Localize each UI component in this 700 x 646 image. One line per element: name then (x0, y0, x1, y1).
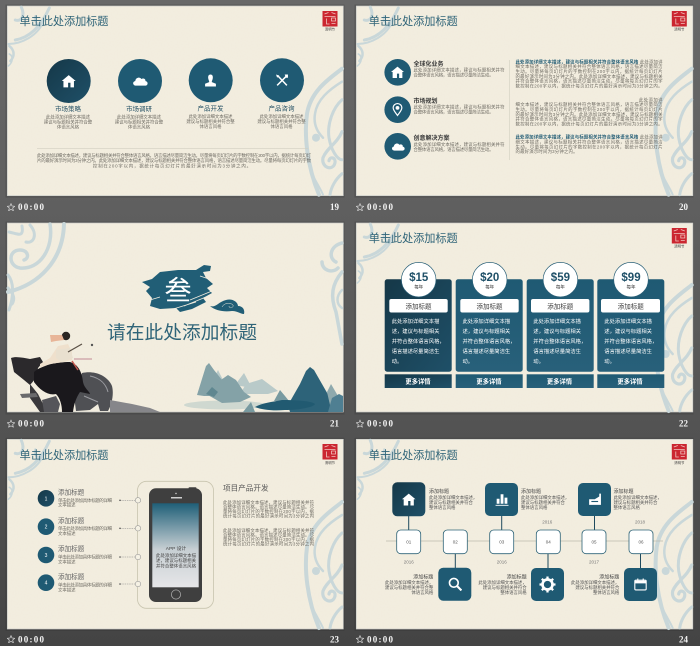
list item: global business: 全球化业务 (414, 60, 444, 68)
illustration: boy riding buffalo (11, 332, 160, 412)
pricing card 99: 更多详情 (617, 376, 643, 386)
step 02 (385, 530, 471, 601)
paragraph 1: 合整体语言风格，语言描述尽量简洁生动。尽 (223, 504, 315, 510)
phone mockup: 并符合整体语言风格 (156, 562, 197, 570)
list item 3: 文本描述 (58, 558, 76, 566)
character: section three: 叁 (164, 276, 192, 306)
step 02: 此处添加详细文本描述， (385, 579, 433, 586)
item text: product development: 体语言风格 (200, 123, 222, 130)
paragraph 2: 的最好演示时间为3分钟之内。此处添加详细文本描述，建议与标题相关 (516, 111, 663, 118)
list item 3: 3 (45, 553, 48, 559)
list item 1 (38, 488, 141, 508)
pricing card 20 (456, 262, 523, 388)
pricing card 15: 语言描述尽量简洁生 (392, 347, 440, 355)
paragraph 1: 此处添加详细文本描述，建议与标题相关并符 (223, 499, 315, 506)
pricing card 99: 并符合整体语言风格， (604, 337, 657, 345)
footer: slide 23: 00:00 (18, 634, 44, 644)
phone mockup: 此处添加详细文本描 (156, 552, 197, 559)
item text: market strategy: 市场策略 (55, 104, 82, 113)
pricing card 20: 动。 (462, 358, 473, 365)
item text: product consulting (257, 104, 306, 130)
item text: product consulting: 此处添加详细文本描述 (260, 113, 304, 120)
list item 2 (38, 516, 141, 537)
pricing card 59: 每年 (556, 284, 565, 290)
phone mockup: 述，建议与标题相关 (156, 557, 197, 564)
step 01: 此处添加详细文本描述， (429, 494, 477, 501)
pricing card 59: 述，建议与标题相关 (533, 327, 582, 335)
paragraph 2: 量将每页幻灯片的字数控制在200字以内，据 (223, 536, 315, 543)
logo seal (322, 444, 338, 465)
panel: slide 24 timeline (354, 438, 694, 631)
list item 3: 添加标题 (58, 544, 85, 553)
pricing card 59: 并符合整体语言风格， (533, 337, 586, 345)
list item 1: 添加标题 (58, 488, 85, 496)
icon: global business (384, 59, 411, 86)
pricing card 20: $20 (480, 272, 499, 284)
list item 4: 单击此处添加具体标题的详细 (58, 582, 113, 588)
logo seal: 清明节 (674, 460, 685, 465)
footer: slide 23: 23 (330, 634, 340, 644)
step 04: 此处添加详细文本描述， (478, 579, 527, 586)
paragraph 1: 量将每页幻灯片的字数控制在200字以内，据 (223, 508, 315, 515)
footer: slide 20: 20 (679, 202, 688, 212)
footer: slide 24 (356, 634, 688, 644)
step 06: 06 (638, 540, 644, 544)
paragraph 2: 此处添加详 (639, 96, 663, 103)
logo seal (322, 11, 338, 32)
phone mockup: APP 设计 (166, 545, 186, 552)
paragraph 1: 并符合整体语言风格，语言描述尽量简洁生动。尽量将每页幻灯片的字 (516, 78, 663, 85)
pricing card 15 (385, 262, 452, 388)
footer: slide 19: 19 (330, 202, 340, 212)
list item: market planning (414, 97, 505, 116)
step 03: 添加标题 (521, 488, 541, 495)
step 06: 2018 (635, 520, 646, 524)
list item: creative solutions (414, 134, 505, 153)
list item 3 (38, 544, 141, 566)
pricing card 15: 并符合整体语言风格， (392, 337, 445, 345)
item text: product consulting: 体语言风格 (271, 123, 293, 130)
step 04: 整体语言风格 (500, 589, 527, 596)
step 04: 2016 (542, 520, 553, 524)
logo seal (672, 228, 687, 248)
list item 2: 2 (45, 525, 48, 531)
footer: slide 24: 00:00 (367, 634, 394, 644)
icon: product development (189, 58, 233, 102)
pricing card 99 (597, 262, 664, 388)
paragraph 2: 数控制在200字以内，据统计每页幻灯片的最好演示时间为3分钟之内。 (516, 120, 662, 127)
step 02: 建议与标题相关并符合整 (385, 584, 434, 591)
list item: creative solutions: 合整体语言风格，语言描述尽量简洁生动。 (414, 146, 494, 153)
pricing card 59: 更多详情 (547, 376, 573, 386)
step 01: 建议与标题相关并符合 (429, 499, 474, 506)
footer: slide 20: 00:00 (367, 202, 394, 212)
paragraph 2: 生动。尽量将每页幻灯片的字数控制在200字以内，据统计每页幻灯片 (516, 106, 662, 113)
pricing card 20: 更多详情 (476, 376, 502, 386)
logo seal (672, 11, 687, 32)
paragraph (37, 152, 312, 170)
item text: product consulting: 产品咨询 (268, 104, 295, 112)
paragraph: 控制在200字以内，据统计每页幻灯片的最好演示时间为3分钟之内。 (93, 162, 251, 170)
step 05 (578, 483, 662, 564)
decoration: right swirl (322, 243, 342, 344)
item text: market research: 体语言风格 (128, 124, 151, 130)
item text: market research: 此处添加详细文本描述 (117, 114, 162, 120)
list item 1: 文本描述 (58, 502, 76, 508)
step 03: 2016 (497, 560, 507, 564)
footer: slide 21 (7, 418, 339, 428)
list item 2: 添加标题 (58, 516, 85, 525)
item text: market strategy: 建议与标题相关并符合整 (44, 118, 93, 126)
step 03: 整体语言风格 (521, 504, 548, 511)
item text: market research: 市场调研 (126, 104, 152, 113)
item text: product development: 此处添加详细文本描述 (189, 113, 233, 120)
item text: product development (186, 104, 235, 130)
illustration: ink mountains (184, 363, 343, 412)
item text: market strategy: 体语言风格 (57, 124, 80, 130)
step 01: 2016 (404, 560, 414, 564)
paragraph 2: 细文本描述，建议与标题相关并符合整体语言风格，语言描述尽量简洁 (516, 101, 663, 108)
title: 单击此处添加标题 (369, 14, 458, 28)
pricing card 59: 动。 (533, 358, 544, 365)
footer: slide 19 (7, 202, 339, 212)
pricing card 20: 述，建议与标题相关 (462, 327, 511, 335)
step 03: 建议与标题相关并符合 (521, 499, 566, 506)
step 01: 01 (406, 540, 412, 544)
step 03 (485, 483, 569, 564)
item text: market research (115, 104, 164, 130)
paragraph 1: 生动。尽量将每页幻灯片的字数控制在200字以内，据统计每页幻灯片 (516, 68, 662, 75)
pricing card 99: $99 (621, 272, 641, 284)
step 06: 整体语言风格 (593, 589, 620, 596)
item text: product development: 建议与标题相关并符合整 (186, 118, 235, 125)
list item: global business: 合整体语言风格，语言描述尽量简洁生动。 (414, 72, 494, 78)
icon: market strategy (47, 59, 91, 103)
pricing card 59: $59 (551, 272, 570, 284)
pricing card 20: 每年 (485, 284, 495, 290)
pricing card 20: 并符合整体语言风格， (462, 337, 515, 345)
paragraph 1: 数控制在200字以内，据统计每页幻灯片的最好演示时间为3分钟之内。 (516, 82, 662, 90)
list item: market planning: 市场规划 (414, 97, 438, 105)
paragraph 1: 的最好演示时间为3分钟之内。此处添加详细文本描述，建议与标题相关 (516, 73, 663, 80)
paragraph 3: 的最好演示时间为3分钟之内。 (516, 148, 578, 155)
panel: slide 19 icons (6, 4, 344, 198)
paragraph 1: 此处添加详细文本描述，建议与标题相关并符合整体语言风格 此处添加详 (516, 58, 663, 65)
step 03: 03 (499, 540, 505, 544)
panel: slide 22 pricing (354, 222, 694, 414)
list item 4: 文本描述 (58, 586, 76, 594)
paragraph: 片的最好演示时间为3分钟之内。此处添加详细文本描述，建议与标题相关并符合整体语言风格，语言描述尽量简洁生动。尽量将每页幻灯片的字数 (37, 157, 312, 164)
step 04: 04 (546, 540, 551, 544)
pricing card 59: 此处添加详细文本描 (533, 317, 582, 325)
paragraph 3: 此处添加详细文本描述，建议与标题相关并符合整体语言风格 此处添加详 (516, 134, 663, 141)
outline around phone (138, 481, 214, 608)
footer: slide 22: 00:00 (367, 418, 394, 428)
pricing card 15: 添加标题 (406, 301, 432, 310)
list item: creative solutions: 此处添加详细文本描述，建议与标题相关并符 (414, 141, 505, 148)
footer: slide 23 (7, 634, 339, 644)
list item 4: 4 (45, 581, 48, 587)
step 05: 整体语言风格 (614, 504, 640, 511)
paragraph 2: 此处添加详细文本描述，建议与标题相关并符 (223, 527, 315, 534)
section title: 请在此处添加标题 (107, 322, 257, 343)
paragraph 1: 统计每页幻灯片的最好演示时间为3分钟之内 (223, 512, 314, 520)
step 04: 添加标题 (507, 574, 527, 580)
footer: slide 19: 00:00 (18, 202, 44, 212)
pricing card 15: 更多详情 (405, 376, 431, 386)
paragraph 1: 细文本描述，建议与标题相关并符合整体语言风格，语言描述尽量简洁 (516, 63, 663, 70)
paragraph 2: 并符合整体语言风格，语言描述尽量简洁生动。尽量将每页幻灯片的字 (516, 116, 663, 123)
paragraph 2: 统计每页幻灯片的最好演示时间为3分钟之内 (223, 540, 314, 548)
pricing card 20: 此处添加详细文本描 (462, 317, 511, 325)
pricing card 99: 此处添加详细文本描 (604, 317, 653, 325)
list item: market planning: 合整体语言风格，语言描述尽量简洁生动。 (414, 108, 494, 116)
paragraph 2 (223, 527, 315, 548)
step 05: 添加标题 (614, 488, 634, 495)
icon: market planning (384, 96, 411, 123)
step 04: 建议与标题相关并符合 (483, 584, 527, 591)
paragraph 1 (516, 58, 663, 90)
pricing card 99: 动。 (604, 358, 615, 365)
step 05: 建议与标题相关并符合 (614, 499, 658, 506)
title: 单击此处添加标题 (369, 231, 458, 245)
paragraph 2 (516, 96, 663, 127)
title: 单击此处添加标题 (20, 448, 108, 462)
panel: slide 21 section cover (6, 222, 344, 414)
title: 单击此处添加标题 (20, 14, 108, 28)
pricing card 99: 语言描述尽量简洁生 (604, 347, 653, 355)
phone mockup (149, 487, 202, 602)
list item 4 (38, 572, 141, 594)
footer: slide 21: 00:00 (18, 418, 44, 428)
pricing card 99: 添加标题 (618, 301, 644, 310)
footer: slide 22 (356, 418, 688, 428)
paragraph: 此处添加详细文本描述，建议与标题相关并符合整体语言风格，语言描述尽量简洁生动。尽量将每页幻灯片的字数控制在200字以内，据统计每页幻灯 (37, 152, 312, 159)
list item: creative solutions: 创意解决方案 (414, 134, 450, 142)
pricing card 59 (527, 262, 594, 388)
list item: global business (414, 60, 505, 78)
footer: slide 20 (356, 202, 688, 212)
footer: slide 22: 22 (679, 418, 688, 428)
item text: market strategy: 此处添加详细文本描述 (46, 114, 91, 120)
footer: slide 24: 24 (679, 634, 688, 644)
step 05: 2017 (589, 560, 600, 564)
logo seal: 清明节 (674, 26, 685, 32)
item text: product development: 产品开发 (198, 104, 224, 112)
step 06: 建议与标题相关并符合 (575, 584, 620, 591)
title: 单击此处添加标题 (369, 448, 458, 462)
paragraph 2: 合整体语言风格，语言描述尽量简洁生动。尽 (223, 532, 315, 538)
ink brush stroke (142, 265, 213, 312)
step 05: 05 (591, 540, 597, 544)
icon: product consulting (260, 58, 304, 102)
step 02: 添加标题 (413, 574, 433, 580)
paragraph 3: 生动。尽量将每页幻灯片的字数控制在200字以内，据统计每页幻灯片 (516, 143, 662, 150)
pricing card 15: 每年 (414, 284, 424, 290)
pricing card 59: 添加标题 (547, 301, 574, 310)
pricing card 15: 此处添加详细文本描 (392, 317, 440, 325)
step 01 (392, 482, 477, 564)
pricing card 15: 述，建议与标题相关 (392, 327, 440, 335)
list item 4: 添加标题 (58, 572, 85, 581)
decoration: top-left swirl (8, 224, 64, 310)
step 02: 02 (453, 540, 458, 544)
footer: slide 21: 21 (330, 418, 340, 428)
list item 2: 文本描述 (58, 530, 76, 537)
panel: slide 23 phone (6, 438, 344, 631)
pricing card 99: 述，建议与标题相关 (604, 327, 653, 335)
list item 1: 单击此处添加具体标题的详细 (58, 497, 113, 504)
cloud ornament (210, 299, 244, 314)
step 02: 体语言风格 (411, 589, 434, 596)
step 06: 添加标题 (599, 574, 619, 580)
pricing card 20: 添加标题 (476, 301, 503, 310)
logo seal (672, 444, 687, 465)
step 05: 此处添加详细文本描述， (614, 494, 662, 501)
step 06: 此处添加详细文本描述， (571, 579, 619, 586)
pricing card 20: 语言描述尽量简洁生 (462, 347, 511, 355)
item text: market strategy (44, 104, 93, 130)
paragraph 1 (223, 499, 315, 520)
pricing card 99: 每年 (626, 284, 636, 290)
step 01: 添加标题 (429, 488, 449, 495)
list item 1: 1 (45, 496, 48, 502)
paragraph 3 (516, 134, 663, 155)
list item: global business: 此处添加详细文本描述，建议与标题相关并符 (414, 66, 505, 74)
item text: market research: 建议与标题相关并符合整 (115, 118, 164, 126)
paragraph 3: 细文本描述，建议与标题相关并符合整体语言风格，语言描述尽量简洁 (516, 138, 663, 146)
list item: market planning: 此处添加详细文本描述，建议与标题相关并符 (414, 104, 505, 110)
item text: product consulting: 建议与标题相关并符合整 (257, 118, 306, 125)
panel: slide 20 list (354, 4, 694, 198)
logo seal: 清明节 (325, 460, 336, 465)
list item 3: 单击此处添加具体标题的详细 (58, 554, 113, 560)
pricing card 15: 动。 (392, 358, 402, 365)
logo seal: 清明节 (325, 26, 336, 32)
pricing card 15: $15 (409, 272, 429, 284)
list item 2: 单击此处添加具体标题的详细 (58, 525, 113, 532)
icon: market research (118, 59, 162, 103)
step 01: 整体语言风格 (429, 504, 456, 511)
logo seal: 清明节 (674, 244, 685, 248)
step 06 (571, 520, 657, 601)
pricing card 59: 语言描述尽量简洁生 (533, 347, 582, 355)
heading: project product development: 项目产品开发 (223, 482, 269, 492)
step 04 (478, 520, 564, 601)
icon: creative solutions (384, 133, 411, 160)
step 03: 此处添加详细文本描述， (521, 494, 569, 501)
